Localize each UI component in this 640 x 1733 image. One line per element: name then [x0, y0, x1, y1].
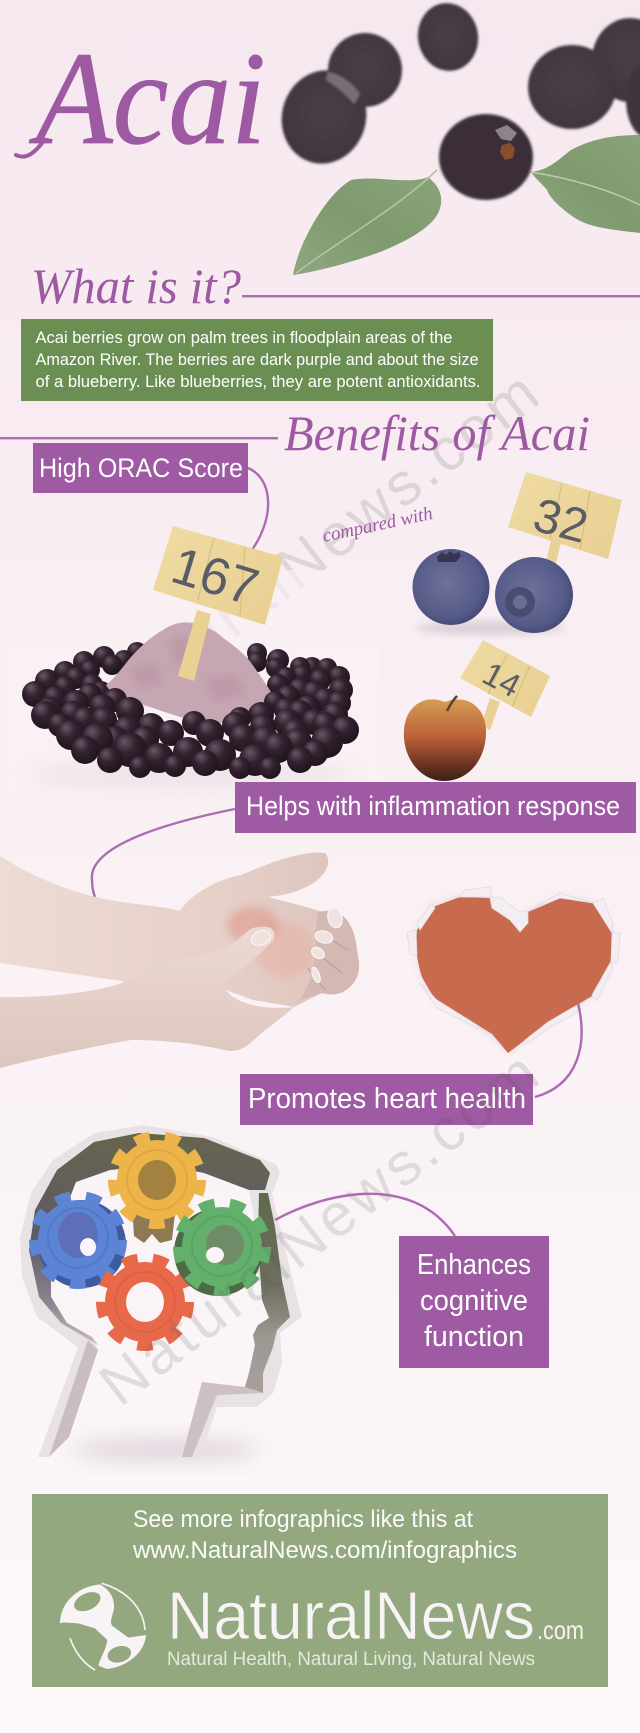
- gear: red: [101, 1258, 189, 1346]
- connector: inflammation to hand: [92, 809, 235, 897]
- illustration: hands: [0, 853, 359, 1068]
- sign: 14: [460, 640, 550, 730]
- illustration: torn paper heart: [407, 887, 620, 1053]
- head depth: throat: [182, 1382, 263, 1457]
- photo: acai powder and berries: [22, 526, 359, 787]
- right leaf: [530, 135, 640, 233]
- panel: footer: [32, 1494, 608, 1687]
- footer text: See more infographics like this at: [133, 1506, 473, 1533]
- panel: what is it text: of a blueberry. Like blueberries, they are potent antioxidants.: [36, 373, 480, 391]
- illustration: head with gears: [20, 1125, 302, 1462]
- heading: Benefits of Acai: Benefits of Acai: [284, 405, 590, 461]
- sign: 167: [153, 526, 283, 681]
- main berry: [439, 114, 533, 200]
- label: Enhances cognitive function: Enhances: [417, 1249, 531, 1281]
- connector: ORAC to 167 sign: [248, 468, 268, 550]
- label: Helps with inflammation response: [235, 782, 636, 833]
- photo backing: powder image: [8, 570, 380, 795]
- logo: globe: [60, 1583, 146, 1670]
- footer text: www.NaturalNews.com/infographics: [132, 1537, 517, 1564]
- panel: what is it text: [21, 319, 493, 401]
- illustration: blueberries: [412, 472, 622, 635]
- sign: 14: 14: [477, 654, 527, 704]
- gear: green: [174, 1203, 266, 1296]
- illustration: acai berries and leaves: [271, 0, 640, 275]
- sign: 167: 167: [165, 537, 265, 617]
- heart: [416, 897, 613, 1053]
- fingers: [300, 911, 359, 1000]
- torn paper shards: [407, 887, 620, 1043]
- lower hand: [0, 927, 294, 1068]
- label: High ORAC Score: [33, 443, 248, 493]
- connector: heart health: [535, 1003, 582, 1097]
- label: Promotes heart health: Promotes heart heallth: [248, 1083, 526, 1115]
- logo: tagline: Natural Health, Natural Living, Natural News: [167, 1649, 535, 1670]
- left leaf: [293, 170, 441, 275]
- illustration: apple with sign: [404, 640, 550, 781]
- head depth: neck: [49, 1340, 98, 1457]
- caption: compared with: compared with: [321, 503, 435, 547]
- head outline: [20, 1125, 302, 1457]
- footer text: [132, 1506, 517, 1564]
- logo: wordmark: .com: [537, 1615, 584, 1645]
- label: Promotes heart health: [240, 1074, 533, 1125]
- watermark: lower: NaturalNews.com: [87, 1039, 550, 1418]
- label: High ORAC Score: High ORAC Score: [39, 453, 243, 483]
- connector: cognitive function: [275, 1194, 455, 1236]
- label: Enhances cognitive function: cognitive: [420, 1285, 528, 1317]
- watermark: upper: NaturalNews.com: [87, 359, 550, 738]
- powder pile: [106, 622, 278, 723]
- fingernails: [249, 907, 344, 984]
- panel: what is it text: Acai berries grow on palm trees in floodplain areas of the: [36, 329, 452, 347]
- gear: blue: [34, 1196, 126, 1288]
- label: Enhances cognitive function: [399, 1236, 549, 1368]
- panel: what is it text: Amazon River. The berries are dark purple and about the size: [36, 351, 478, 369]
- head depth: back and top: [29, 1133, 270, 1345]
- gear: yellow: [113, 1136, 201, 1243]
- sign: 32: [508, 472, 622, 566]
- label: Enhances cognitive function: function: [424, 1321, 524, 1353]
- sign: 32: 32: [528, 489, 593, 554]
- logo: wordmark: NaturalNews: [167, 1578, 535, 1654]
- heading: What is it?: What is it?: [31, 258, 241, 314]
- label: Helps with inflammation response: Helps with inflammation response: [246, 791, 620, 821]
- title: Acai: [28, 24, 266, 172]
- head depth: face: [245, 1193, 290, 1393]
